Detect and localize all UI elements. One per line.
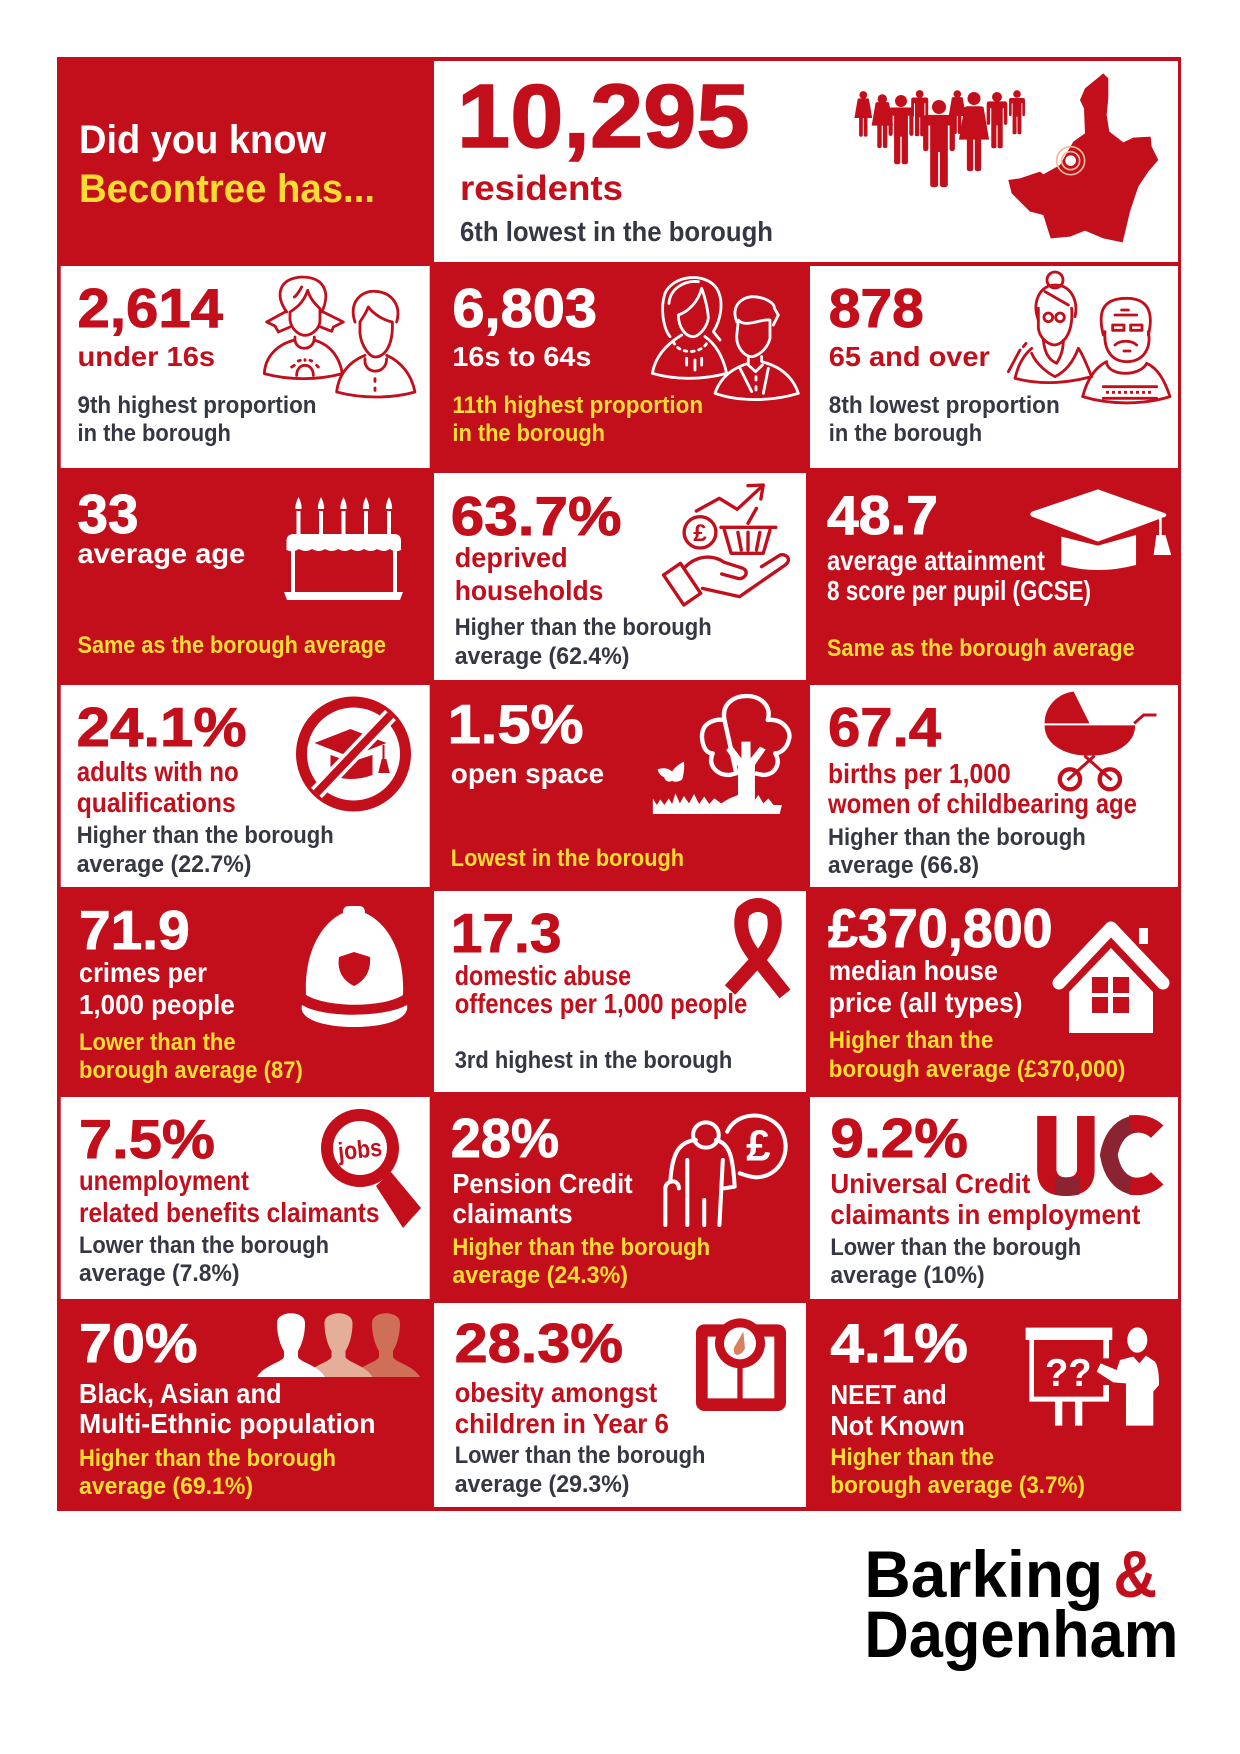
label: crimes: crimes per bbox=[79, 957, 207, 988]
label: no qualifications bbox=[77, 756, 239, 818]
label: 65 and over: 65 and over bbox=[829, 341, 990, 372]
note: 16s to 64s rank: 11th highest proportion bbox=[452, 392, 703, 419]
label: deprived households: deprived bbox=[455, 542, 568, 573]
logo: Barking & Dagenham: Barking bbox=[864, 1537, 1103, 1611]
label: universal credit: Universal Credit bbox=[830, 1168, 1030, 1199]
panel: header bbox=[57, 57, 432, 264]
number: 1.5%: 1.5% bbox=[448, 693, 584, 755]
label: under 16s: under 16s bbox=[78, 341, 215, 372]
label: crimes bbox=[79, 957, 235, 1020]
note: deprived comparison bbox=[455, 614, 712, 670]
panel: no qualifications bbox=[61, 685, 430, 887]
label: unemployment bbox=[79, 1165, 380, 1228]
label: pension credit: claimants bbox=[452, 1198, 573, 1229]
note: ethnicity comparison bbox=[79, 1445, 336, 1500]
panel: house price bbox=[808, 889, 1181, 1095]
label: NEET: Not Known bbox=[830, 1410, 965, 1441]
note: no qualifications comparison: average (22.7%) bbox=[77, 851, 252, 878]
label: universal credit bbox=[830, 1168, 1140, 1230]
icon: hand with basket and coin bbox=[664, 485, 788, 605]
note: no qualifications comparison: Higher than the borough bbox=[77, 822, 334, 849]
number: 2,614: 2,614 bbox=[78, 277, 223, 339]
label: house price: price (all types) bbox=[829, 987, 1023, 1018]
panel: 16s to 64s bbox=[432, 264, 808, 470]
panel: attainment bbox=[808, 470, 1181, 683]
note: obesity comparison bbox=[455, 1442, 705, 1498]
icon: house bbox=[1059, 928, 1163, 1033]
label: domestic abuse: domestic abuse bbox=[455, 960, 631, 991]
number: 878: 878 bbox=[829, 277, 924, 339]
note: crimes comparison bbox=[79, 1029, 303, 1084]
panel: ethnicity bbox=[57, 1301, 432, 1511]
note: no qualifications comparison bbox=[77, 822, 334, 878]
note: residents rank: 6th lowest in the borough bbox=[460, 216, 773, 247]
note: unemployment comparison: Lower than the borough bbox=[79, 1232, 329, 1259]
note: crimes comparison: Lower than the bbox=[79, 1029, 236, 1056]
number: 7.5%: 7.5% bbox=[79, 1108, 215, 1170]
panel: deprived households bbox=[434, 473, 806, 680]
number: 6,803: 6,803 bbox=[452, 277, 597, 339]
label: deprived households bbox=[455, 542, 603, 606]
label: attainment: average attainment bbox=[827, 545, 1045, 576]
note: under 16s rank bbox=[78, 392, 316, 447]
note: attainment comparison: Same as the borough average bbox=[827, 635, 1135, 662]
label: open space: open space bbox=[451, 758, 604, 789]
label: obesity: obesity amongst bbox=[455, 1377, 657, 1408]
heading: did you know: Did you know bbox=[79, 118, 327, 162]
label: obesity bbox=[455, 1377, 669, 1439]
panel: under 16s bbox=[61, 266, 430, 468]
note: universal credit comparison bbox=[830, 1234, 1081, 1289]
icon: magnifier with jobs bbox=[327, 1115, 421, 1228]
icon: three silhouettes bbox=[257, 1313, 420, 1377]
label: NEET: NEET and bbox=[830, 1379, 947, 1410]
note: domestic abuse rank: 3rd highest in the borough bbox=[455, 1047, 732, 1074]
logo: Barking & Dagenham: Dagenham bbox=[864, 1597, 1178, 1671]
number: 48.7: 48.7 bbox=[827, 484, 938, 546]
note: births comparison bbox=[828, 824, 1086, 879]
grid background bbox=[57, 57, 1181, 1511]
note: 65 and over rank bbox=[829, 392, 1060, 447]
label: domestic abuse: offences per 1,000 people bbox=[455, 988, 747, 1019]
number: 67.4: 67.4 bbox=[828, 696, 941, 758]
icon: pensioner with pound coin: £ bbox=[746, 1123, 771, 1171]
icon: adults bbox=[652, 278, 798, 400]
logo: Barking & Dagenham: & bbox=[1114, 1537, 1157, 1611]
number: 17.3: 17.3 bbox=[451, 902, 562, 964]
label: attainment bbox=[827, 545, 1091, 606]
label: births: women of childbearing age bbox=[827, 788, 1137, 819]
note: crimes comparison: borough average (87) bbox=[79, 1057, 303, 1084]
label: ethnicity: Multi-Ethnic population bbox=[79, 1408, 376, 1439]
note: universal credit comparison: average (10%) bbox=[830, 1262, 985, 1289]
number: 71.9: 71.9 bbox=[79, 899, 190, 961]
note: deprived comparison: average (62.4%) bbox=[455, 643, 630, 670]
number: 4.1%: 4.1% bbox=[830, 1312, 968, 1374]
label: pension credit bbox=[452, 1168, 633, 1229]
icon: pensioner with pound coin bbox=[665, 1116, 786, 1225]
note: house price comparison: borough average (£370,000) bbox=[829, 1056, 1125, 1083]
panel: average age bbox=[57, 470, 432, 683]
note: under 16s rank: in the borough bbox=[78, 420, 231, 447]
note: 65 and over rank: in the borough bbox=[829, 420, 982, 447]
heading: Becontree has: Becontree has... bbox=[79, 167, 375, 211]
icon: graduation cap bbox=[1030, 489, 1171, 570]
note: under 16s rank: 9th highest proportion bbox=[78, 392, 316, 419]
icon: no graduation cap bbox=[302, 702, 406, 806]
logo: Barking & Dagenham bbox=[864, 1537, 1178, 1671]
label: attainment: 8 score per pupil (GCSE) bbox=[827, 575, 1091, 606]
panel: pension credit bbox=[432, 1095, 808, 1301]
note: pension credit comparison: average (24.3%) bbox=[452, 1262, 628, 1289]
note: pension credit comparison bbox=[452, 1234, 710, 1289]
label: obesity: children in Year 6 bbox=[455, 1408, 669, 1439]
label: unemployment: related benefits claimants bbox=[79, 1197, 380, 1228]
label: crimes: 1,000 people bbox=[79, 989, 235, 1020]
note: 16s to 64s rank bbox=[452, 392, 703, 447]
icon: pram bbox=[1045, 692, 1156, 789]
label: ethnicity bbox=[79, 1378, 376, 1439]
icon: birthday cake bbox=[284, 497, 403, 600]
note: unemployment comparison: average (7.8%) bbox=[79, 1260, 240, 1287]
label: deprived households: households bbox=[455, 575, 603, 606]
label: house price: median house bbox=[829, 955, 998, 986]
number: residents: 10,295 bbox=[457, 67, 750, 167]
note: house price comparison bbox=[829, 1027, 1125, 1083]
label: births: births per 1,000 bbox=[828, 758, 1011, 789]
note: pension credit comparison: Higher than the borough bbox=[452, 1234, 710, 1261]
note: NEET comparison: Higher than the bbox=[830, 1444, 994, 1471]
icon: tree, grass and butterfly bbox=[653, 696, 789, 814]
label: domestic abuse bbox=[455, 960, 747, 1019]
label: 16s to 64s: 16s to 64s bbox=[452, 341, 591, 372]
number: 24.1%: 24.1% bbox=[77, 696, 247, 758]
panel: NEET bbox=[808, 1301, 1181, 1511]
note: ethnicity comparison: average (69.1%) bbox=[79, 1473, 253, 1500]
number: 28%: 28% bbox=[451, 1107, 559, 1169]
number: 28.3%: 28.3% bbox=[455, 1312, 623, 1374]
label: no qualifications: qualifications bbox=[77, 787, 236, 818]
number: £370,800: £370,800 bbox=[828, 897, 1053, 959]
note: universal credit comparison: Lower than the borough bbox=[830, 1234, 1081, 1261]
note: NEET comparison bbox=[830, 1444, 1085, 1499]
panel: open space bbox=[432, 683, 808, 891]
icon: crowd of people bbox=[854, 90, 1025, 187]
note: open space comparison: Lowest in the borough bbox=[451, 845, 684, 872]
note: unemployment comparison bbox=[79, 1232, 329, 1287]
note: 65 and over rank: 8th lowest proportion bbox=[829, 392, 1060, 419]
note: births comparison: Higher than the borough bbox=[828, 824, 1086, 851]
label: unemployment: unemployment bbox=[79, 1165, 249, 1196]
panel: crimes bbox=[57, 889, 432, 1095]
number: 70%: 70% bbox=[79, 1312, 198, 1374]
icon: presenter at board bbox=[1026, 1327, 1159, 1426]
icon: magnifier with jobs: jobs bbox=[336, 1134, 383, 1166]
icon: presenter at board: ?? bbox=[1045, 1351, 1092, 1395]
icon: police helmet bbox=[302, 906, 407, 1027]
label: house price bbox=[829, 955, 1023, 1018]
panel: universal credit bbox=[810, 1097, 1178, 1299]
label: residents: residents bbox=[460, 169, 623, 208]
panel: 65 and over bbox=[810, 266, 1178, 468]
icon: older people bbox=[1008, 272, 1170, 403]
number: 9.2%: 9.2% bbox=[830, 1107, 968, 1169]
panel: obesity bbox=[434, 1303, 806, 1507]
note: average age comparison: Same as the borough average bbox=[78, 632, 386, 659]
label: NEET bbox=[830, 1379, 965, 1441]
label: universal credit: claimants in employment bbox=[830, 1199, 1140, 1230]
label: pension credit: Pension Credit bbox=[452, 1168, 633, 1199]
icon: hand with basket and coin: £ bbox=[693, 520, 707, 547]
note: NEET comparison: borough average (3.7%) bbox=[830, 1472, 1085, 1499]
label: ethnicity: Black, Asian and bbox=[79, 1378, 282, 1409]
icon: ribbon bbox=[730, 905, 785, 994]
label: average age: average age bbox=[78, 538, 245, 569]
note: 16s to 64s rank: in the borough bbox=[452, 420, 605, 447]
label: births bbox=[827, 758, 1137, 819]
note: house price comparison: Higher than the bbox=[829, 1027, 993, 1054]
number: 63.7%: 63.7% bbox=[451, 485, 622, 547]
icon: borough map bbox=[1008, 73, 1158, 242]
note: ethnicity comparison: Higher than the borough bbox=[79, 1445, 336, 1472]
icon: UC logo bbox=[1037, 1116, 1157, 1196]
panel: residents bbox=[434, 61, 1178, 262]
note: obesity comparison: Lower than the borough bbox=[455, 1442, 705, 1469]
panel: unemployment bbox=[61, 1097, 430, 1299]
number: 33: 33 bbox=[78, 483, 138, 545]
panel: births bbox=[810, 685, 1178, 887]
icon: weighing scales bbox=[696, 1318, 786, 1411]
note: births comparison: average (66.8) bbox=[828, 852, 979, 879]
label: no qualifications: adults with no bbox=[77, 756, 239, 787]
panel: domestic abuse bbox=[434, 891, 806, 1092]
note: obesity comparison: average (29.3%) bbox=[455, 1471, 630, 1498]
icon: children bbox=[264, 277, 415, 397]
note: deprived comparison: Higher than the borough bbox=[455, 614, 712, 641]
